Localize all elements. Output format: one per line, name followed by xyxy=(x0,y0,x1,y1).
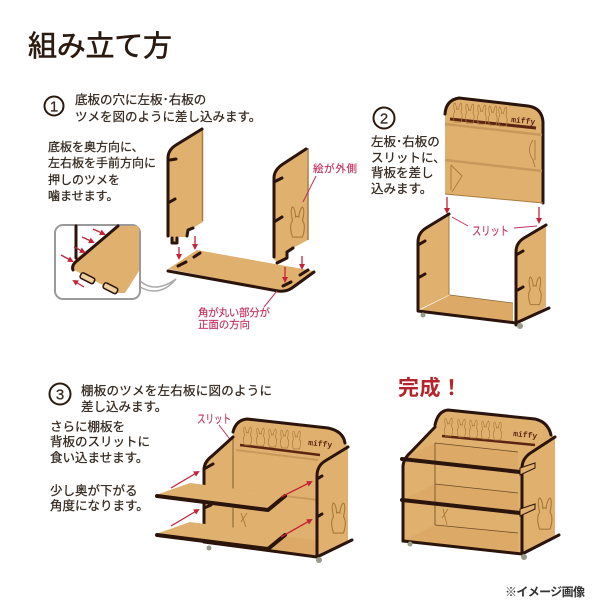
step 2 back board xyxy=(445,97,543,203)
step 1 heading: ツメを図のように差し込みます。 xyxy=(75,110,261,124)
step 1 label: rounded corner: 正面の方向 xyxy=(198,318,250,331)
step 3 note: 食い込ませます。 xyxy=(50,451,148,465)
step 3 note: 3 xyxy=(56,386,64,404)
step 2 note: 込みます。 xyxy=(371,182,432,196)
step 3 note: 少し奥が下がる xyxy=(50,483,138,498)
completed shelf unit xyxy=(402,410,559,560)
completed shelf unit: miffy xyxy=(513,430,538,442)
step 1 left board xyxy=(167,128,203,243)
step 3 note: 棚板のツメを左右板に図のように xyxy=(81,383,272,398)
step 3 shelf unit: miffy xyxy=(308,439,333,451)
step 2 note: スリットに、 xyxy=(371,151,446,165)
step 1 heading xyxy=(44,92,261,124)
step 2 note xyxy=(371,108,446,196)
step 2 arrows xyxy=(447,197,539,222)
step 3 slit label xyxy=(197,412,239,451)
step 1 label: rounded corner: 角が丸い部分が xyxy=(198,306,270,319)
step 3 note: 差し込みます。 xyxy=(81,400,167,414)
step 3 note: さらに棚板を xyxy=(50,419,125,434)
step 2 back board: miffy xyxy=(511,116,536,128)
step 1 label: outside face xyxy=(303,162,357,202)
step 3 shelf unit xyxy=(204,419,352,563)
step 1 label: outside face: 絵が外側 xyxy=(313,162,357,175)
step 3 note: 角度になります。 xyxy=(50,498,149,513)
detail inset xyxy=(55,225,176,299)
step 1 base board xyxy=(168,250,314,291)
step 2 note: 2 xyxy=(380,110,388,128)
step 3 slit label: スリット xyxy=(197,412,231,426)
step 3 note xyxy=(50,383,272,513)
step 3 arrows xyxy=(171,472,311,537)
step 1 right board xyxy=(273,148,308,263)
step 1 arrows xyxy=(179,236,302,281)
step 1 side note: 底板を奥方向に、 xyxy=(48,139,144,154)
step 2 assembled sides xyxy=(418,214,549,329)
step 3 shelves xyxy=(156,483,285,549)
step 2 slit label xyxy=(452,217,537,238)
step 1 label: rounded corner xyxy=(198,291,277,331)
step 3 note: 背板のスリットに xyxy=(50,435,150,449)
step 1 side note: 噛ませます。 xyxy=(48,189,118,203)
step 1 side note xyxy=(48,139,156,203)
step 1 side note: 左右板を手前方向に xyxy=(48,155,156,170)
step 2 slit label: スリット xyxy=(472,224,509,238)
step 1 heading: 底板の穴に左板･右板の xyxy=(75,92,206,107)
step 2 note: 左板･右板の xyxy=(371,134,440,149)
image note: ※イメージ画像 xyxy=(505,584,585,599)
title: 組み立て方 xyxy=(28,30,172,63)
step 2 note: 背板を差し xyxy=(371,166,434,180)
step 1 heading: 1 xyxy=(50,98,58,116)
completed heading: 完成！ xyxy=(398,376,462,400)
step 1 side note: 押しのツメを xyxy=(48,173,120,187)
